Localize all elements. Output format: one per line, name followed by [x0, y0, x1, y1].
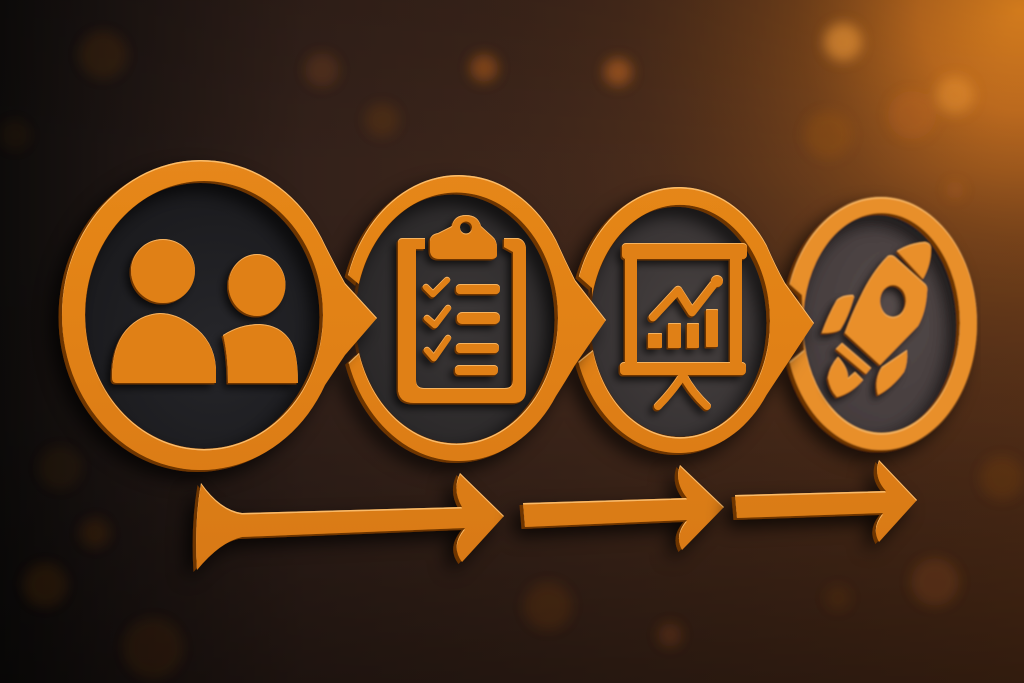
badge ring with pointer [573, 187, 814, 453]
arrow 2 [523, 465, 724, 550]
icon: rocket [822, 242, 931, 397]
icon: presentation board with chart [620, 243, 747, 406]
step 3: presentation badge [573, 187, 814, 453]
arrow 1 [196, 473, 504, 570]
badge ring with pointer [343, 175, 606, 461]
arrow 3 [735, 460, 917, 542]
step 1: people badge [62, 160, 377, 470]
badge face [589, 204, 771, 438]
badge ring [785, 197, 977, 450]
icon: clipboard checklist [398, 215, 526, 403]
step 4: rocket badge [785, 197, 977, 450]
badge face [354, 192, 559, 444]
badge ring with pointer [62, 160, 377, 470]
badge face [84, 180, 324, 450]
badge face [802, 211, 962, 435]
icon: two people [112, 239, 298, 383]
step 2: checklist badge [343, 175, 606, 461]
